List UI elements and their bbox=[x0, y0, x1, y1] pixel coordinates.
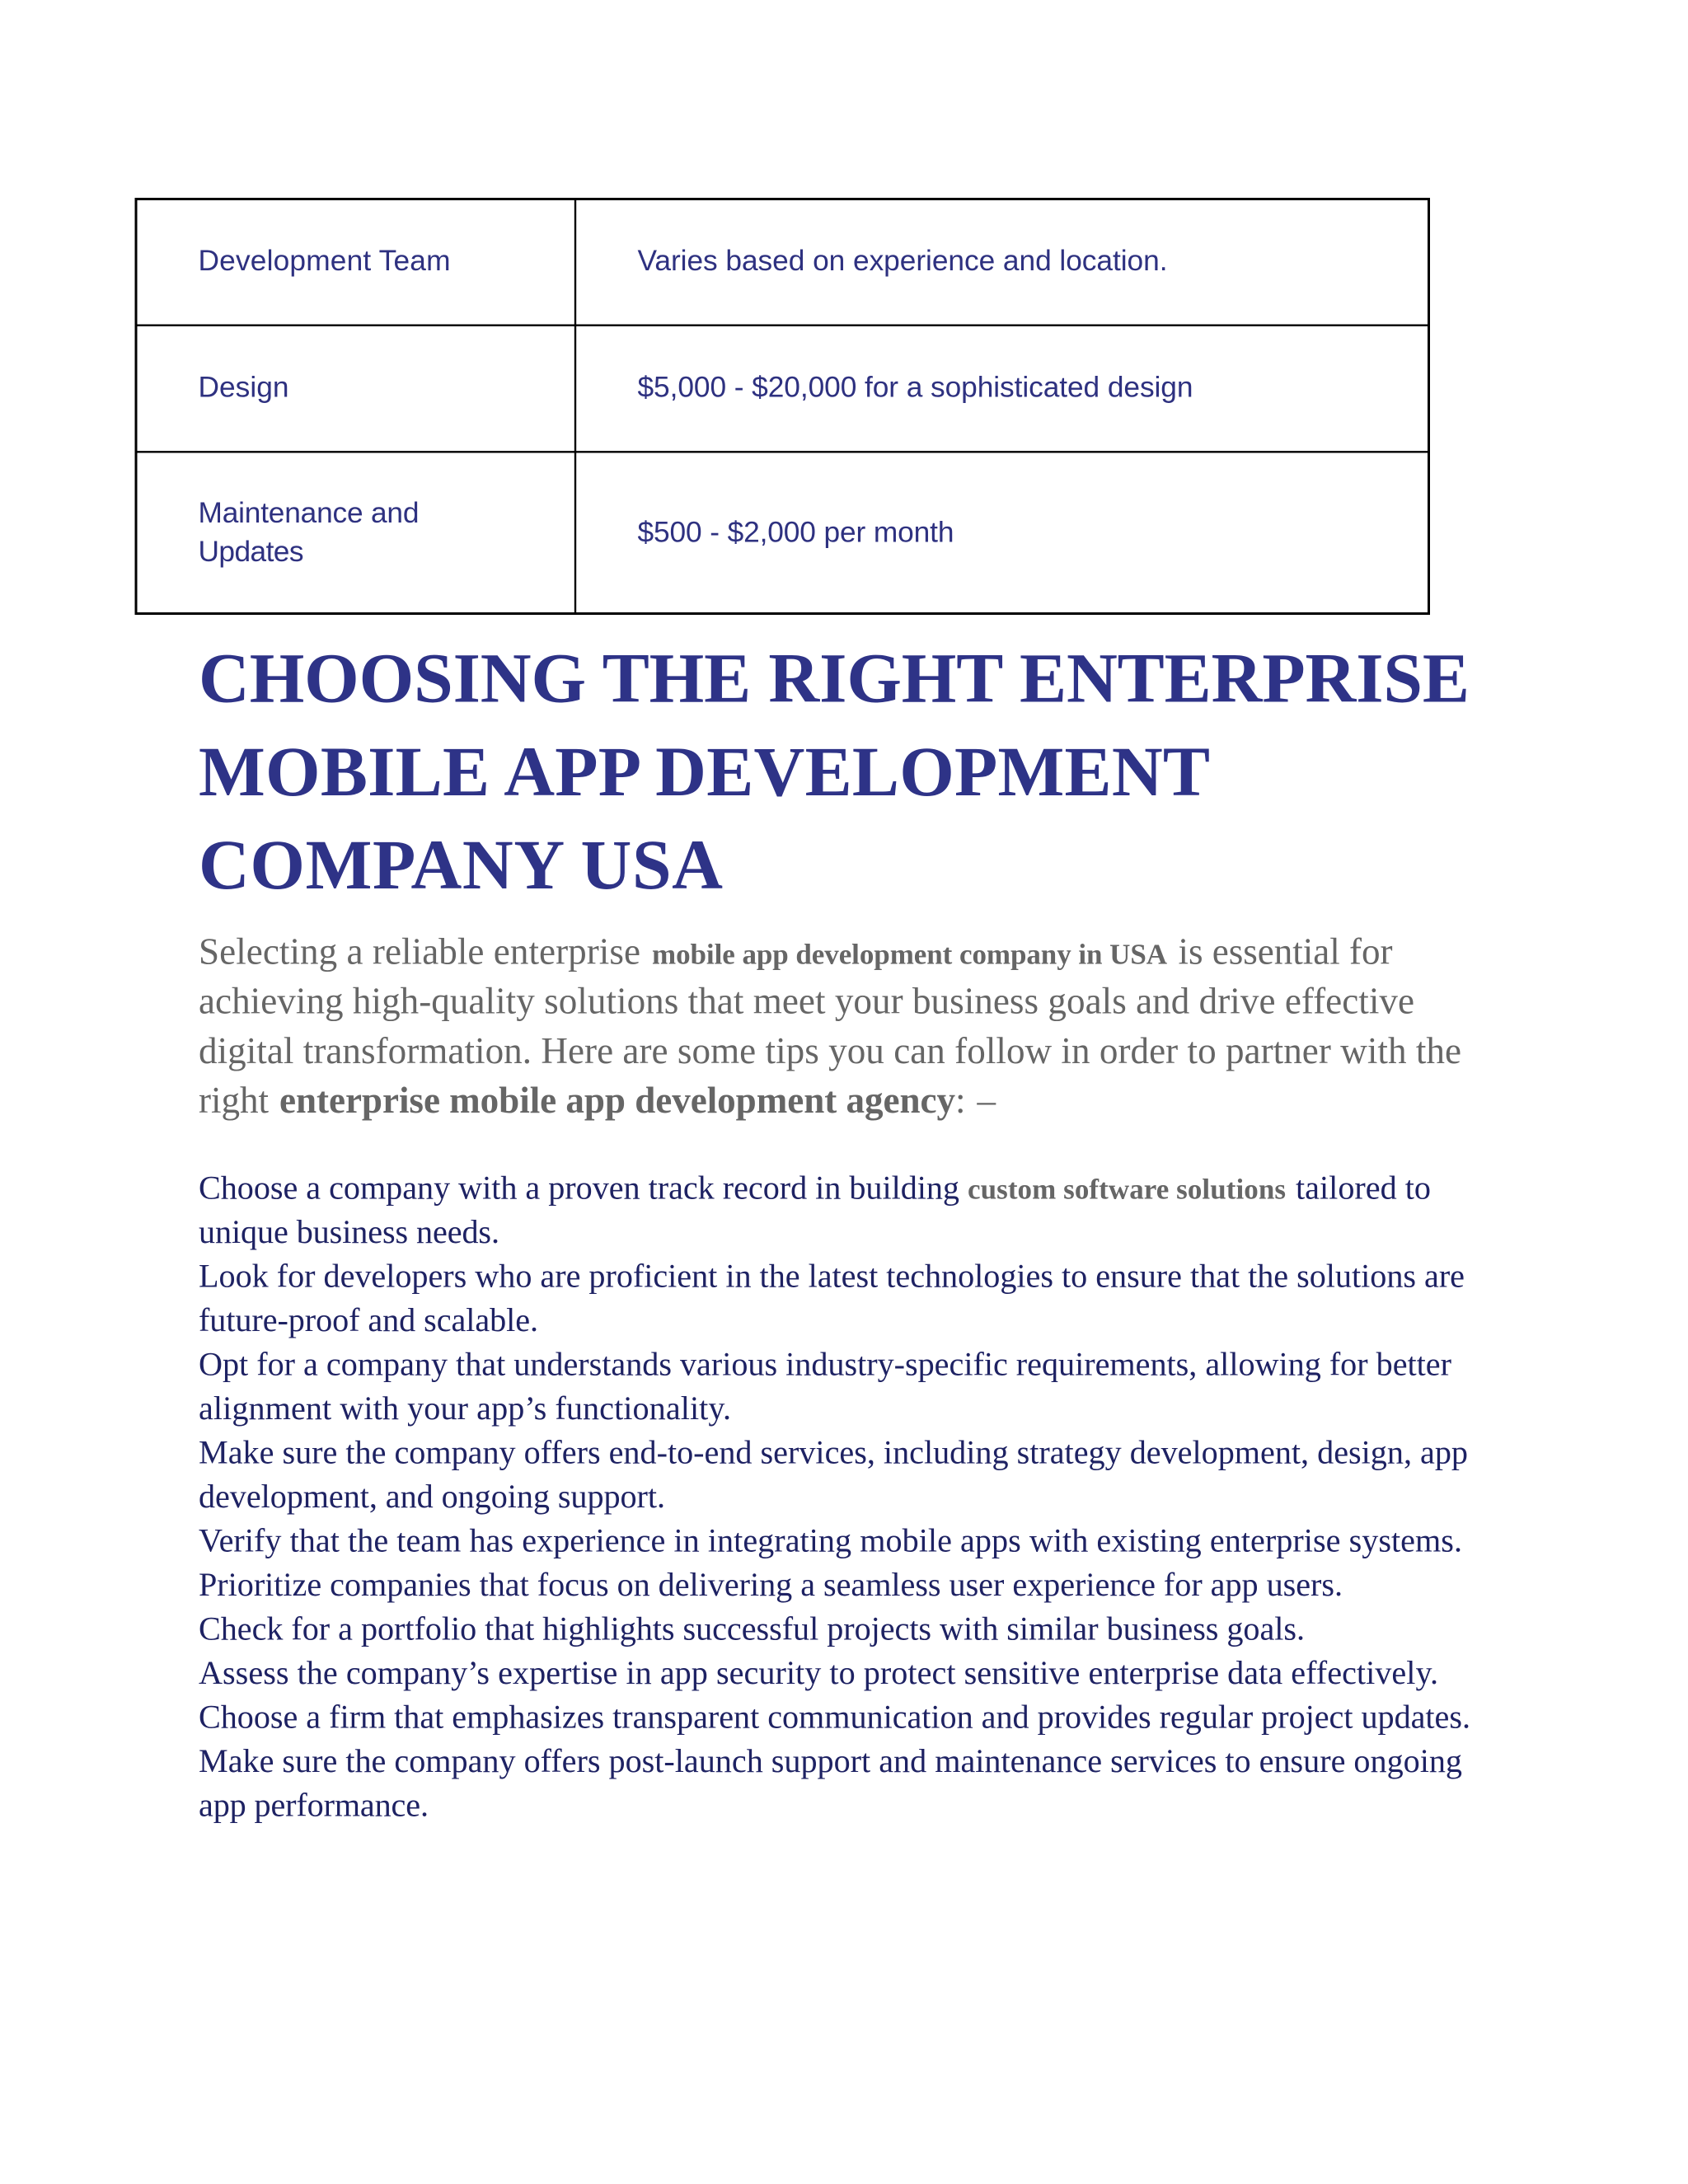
intro paragraph: : – bbox=[955, 1080, 996, 1121]
tips list: Make sure the company offers end-to-end services, including strategy development, design, app bbox=[199, 1434, 1468, 1470]
tips list bbox=[199, 1169, 1470, 1823]
row: design: $5,000 - $20,000 for a sophisticated design bbox=[638, 371, 1193, 404]
row: maintenance and updates bbox=[198, 497, 954, 568]
tips list: future-proof and scalable. bbox=[199, 1301, 538, 1338]
tips list: Look for developers who are proficient in the latest technologies to ensure that the solutions are bbox=[199, 1258, 1465, 1294]
tips list: Check for a portfolio that highlights successful projects with similar business goals. bbox=[199, 1610, 1305, 1647]
row: development team: Varies based on experience and location. bbox=[638, 245, 1167, 277]
row: development team bbox=[198, 245, 1167, 277]
tips list: Make sure the company offers post-launch support and maintenance services to ensure ongoing bbox=[199, 1742, 1462, 1779]
row: maintenance and updates: $500 - $2,000 per month bbox=[638, 516, 954, 549]
tips list: development, and ongoing support. bbox=[199, 1478, 665, 1515]
intro paragraph bbox=[199, 931, 1461, 1121]
heading: CHOOSING THE RIGHT ENTERPRISE bbox=[199, 640, 1470, 718]
heading: MOBILE APP DEVELOPMENT bbox=[199, 733, 1210, 811]
tips list: custom software solutions bbox=[968, 1174, 1286, 1205]
tips list: Choose a company with a proven track record in building bbox=[199, 1169, 959, 1207]
row: development team: Development Team bbox=[198, 245, 450, 277]
intro paragraph: Selecting a reliable enterprise bbox=[199, 931, 640, 972]
row: design: Design bbox=[198, 371, 288, 404]
intro paragraph: achieving high-quality solutions that meet your business goals and drive effective bbox=[199, 981, 1414, 1022]
tips list: Assess the company’s expertise in app security to protect sensitive enterprise data effectively. bbox=[199, 1654, 1438, 1691]
tips list: alignment with your app’s functionality. bbox=[199, 1390, 731, 1427]
table: cost breakdown bbox=[136, 199, 1429, 613]
intro paragraph: is essential for bbox=[1179, 931, 1393, 972]
tips list: Opt for a company that understands various industry-specific requirements, allowing for better bbox=[199, 1345, 1452, 1383]
row: design bbox=[198, 371, 1193, 404]
row: maintenance and updates: Maintenance and bbox=[198, 497, 419, 529]
tips list: unique business needs. bbox=[199, 1213, 499, 1250]
row: maintenance and updates: Updates bbox=[198, 536, 303, 568]
tips list: Prioritize companies that focus on delivering a seamless user experience for app users. bbox=[199, 1566, 1343, 1603]
tips list: Choose a firm that emphasizes transparent communication and provides regular project updates. bbox=[199, 1698, 1470, 1736]
heading bbox=[199, 640, 1470, 904]
intro paragraph: right bbox=[199, 1080, 269, 1121]
intro paragraph: enterprise mobile app development agency bbox=[279, 1080, 955, 1121]
intro paragraph: digital transformation. Here are some tips you can follow in order to partner with the bbox=[199, 1030, 1461, 1071]
tips list: tailored to bbox=[1296, 1169, 1431, 1207]
intro paragraph: mobile app development company in USA bbox=[652, 938, 1168, 971]
heading: COMPANY USA bbox=[199, 826, 723, 904]
tips list: app performance. bbox=[199, 1787, 429, 1823]
tips list: Verify that the team has experience in integrating mobile apps with existing enterprise systems. bbox=[199, 1521, 1462, 1559]
